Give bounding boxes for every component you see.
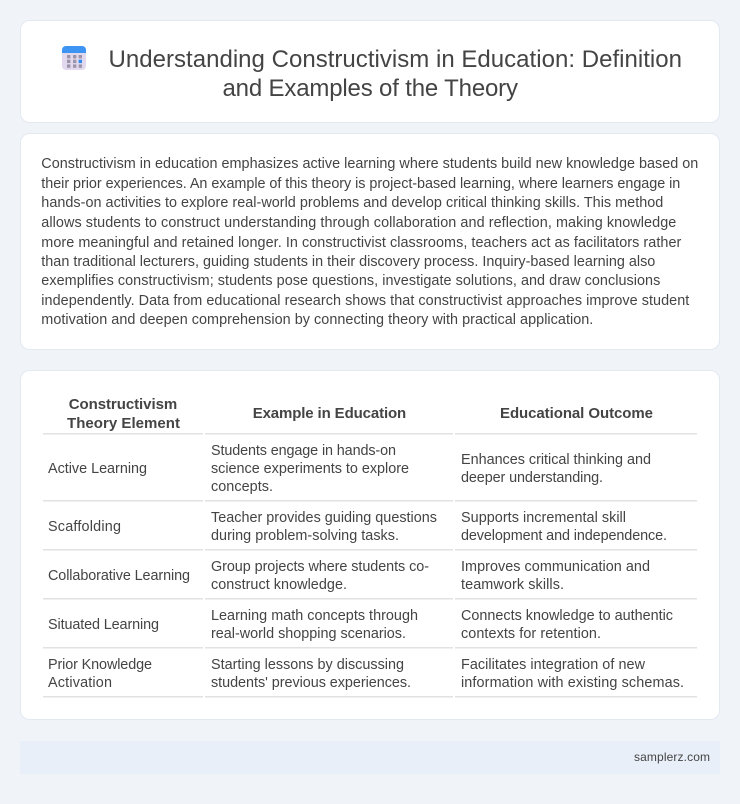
row: scaffolding: Teacher provides guiding questions — [211, 510, 437, 526]
row: situated learning: Connects knowledge to authentic — [461, 608, 673, 624]
row: situated learning: real-world shopping scenarios. — [211, 626, 406, 642]
text block: summary: their prior experiences. An example of this theory is project-based learning, where learners engage in — [41, 176, 680, 192]
row: situated learning: Situated Learning — [48, 617, 159, 633]
row: scaffolding: development and independence. — [461, 528, 667, 544]
text block: summary: allows students to construct understanding through collaboration and reflection, making knowledge — [41, 215, 676, 231]
row: prior knowledge activation: Activation — [48, 675, 112, 691]
table header — [67, 396, 653, 432]
row: active learning: deeper understanding. — [461, 470, 603, 486]
title: Understanding Constructivism in Education: Definition — [108, 46, 682, 73]
text block: summary: hands-on activities to explore real-world problems and develop critical thinking skills. This method — [41, 195, 663, 211]
panel: title card — [20, 20, 720, 122]
row: situated learning: Learning math concepts through — [211, 608, 418, 624]
row: prior knowledge activation: Facilitates integration of new — [461, 657, 646, 673]
row: active learning: Enhances critical thinking and — [461, 452, 651, 468]
text block: summary: more meaningful and retained longer. In constructivist classrooms, teachers act as facilitators rather — [41, 235, 682, 251]
row: active learning: science experiments to explore — [211, 461, 409, 477]
table header: Theory Element — [67, 415, 180, 432]
row: scaffolding: Scaffolding — [48, 519, 121, 535]
row: active learning: Students engage in hands-on — [211, 443, 396, 459]
title — [108, 46, 682, 102]
row: scaffolding — [48, 510, 667, 544]
footer bar — [20, 741, 720, 774]
row: situated learning: contexts for retention. — [461, 626, 601, 642]
row: scaffolding: during problem-solving tasks. — [211, 528, 399, 544]
row: collaborative learning: Improves communication and — [461, 559, 650, 575]
row: prior knowledge activation: information with existing schemas. — [461, 675, 684, 691]
row: scaffolding: Supports incremental skill — [461, 510, 626, 526]
panel: table card — [20, 370, 720, 720]
table header: Educational Outcome — [500, 405, 653, 422]
footer text: samplerz.com — [634, 750, 710, 764]
row: active learning — [48, 443, 651, 495]
panel: summary paragraph — [20, 134, 720, 350]
row: collaborative learning: construct knowledge. — [211, 577, 347, 593]
row: prior knowledge activation — [48, 657, 684, 691]
row: collaborative learning — [48, 559, 650, 593]
row: collaborative learning: Collaborative Learning — [48, 568, 190, 584]
table header: Example in Education — [253, 405, 406, 422]
row: situated learning — [48, 608, 673, 642]
text block: summary: independently. Data from educational research shows that constructivist approaches improve student — [41, 293, 689, 309]
row: collaborative learning: teamwork skills. — [461, 577, 564, 593]
text block: summary — [41, 156, 698, 328]
text block: summary: than traditional lecturers, guiding students in their discovery process. Inquiry-based learning also — [41, 254, 655, 270]
row: prior knowledge activation: Starting lessons by discussing — [211, 657, 404, 673]
row: active learning: Active Learning — [48, 461, 147, 477]
row: active learning: concepts. — [211, 479, 273, 495]
text block: summary: motivation and deepen comprehension by connecting theory with practical application. — [41, 312, 593, 328]
icon: calendar — [62, 46, 86, 70]
title: and Examples of the Theory — [222, 75, 518, 102]
row: collaborative learning: Group projects where students co- — [211, 559, 429, 575]
table rules — [43, 433, 697, 698]
table header: Constructivism — [69, 396, 177, 413]
row: prior knowledge activation: students' previous experiences. — [211, 675, 411, 691]
text block: summary: Constructivism in education emphasizes active learning where students build new knowledge based on — [41, 156, 698, 172]
text block: summary: exemplifies constructivism; students pose questions, investigate solutions, and draw conclusions — [41, 273, 660, 289]
row: prior knowledge activation: Prior Knowledge — [48, 657, 152, 673]
